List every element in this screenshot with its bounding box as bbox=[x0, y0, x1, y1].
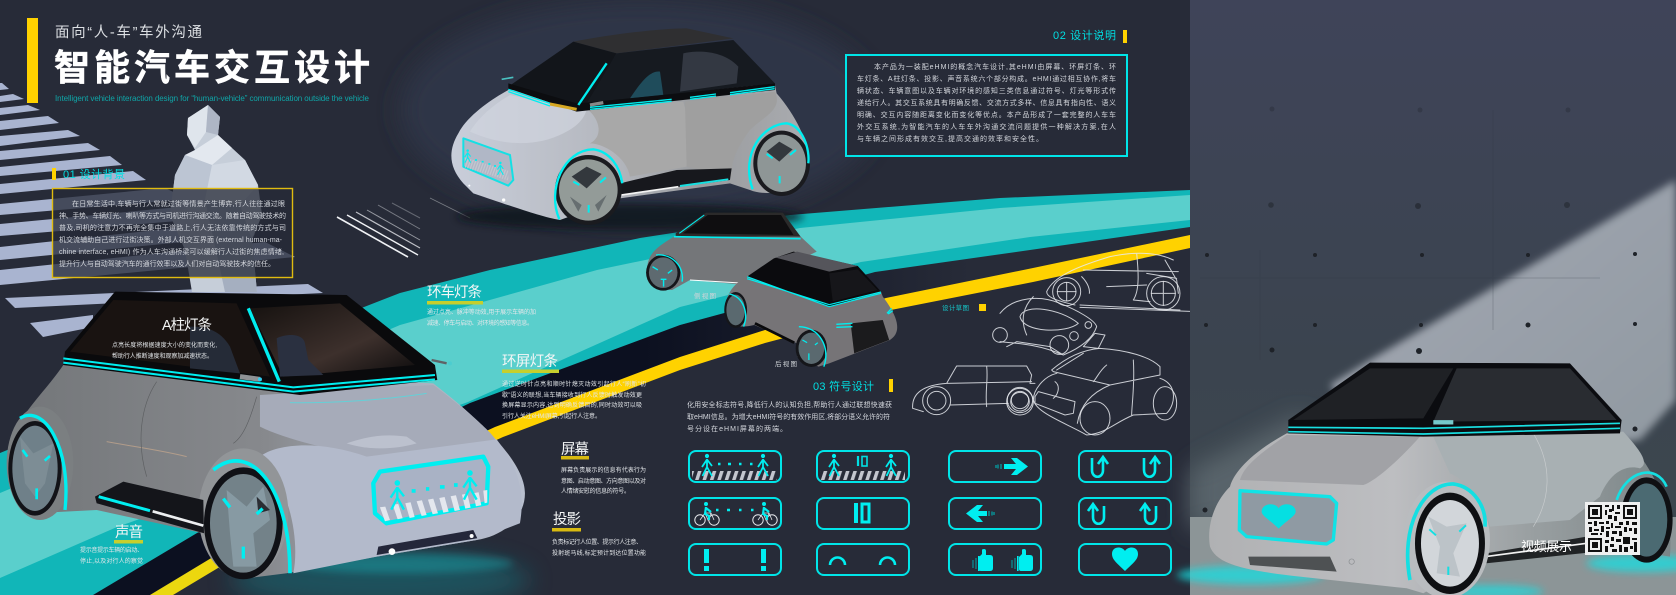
panel: design explanation heading: 02 设计说明 bbox=[1053, 28, 1116, 42]
panel: design background text box: 普及,司机的注意力不再完全集中于道路上,行人无法依靠传统的方式与司 bbox=[59, 223, 286, 232]
road band: black shadow strip bbox=[93, 227, 1190, 595]
callout: screen ring light strip: 换屏幕显示内容,达到明确反馈目的,同时动效可以吸 bbox=[502, 401, 642, 409]
callout: vehicle ring light strip: 减速、停车与启动、对环境的感知等信息。 bbox=[427, 319, 533, 327]
section heading: 03 symbol design: 03 符号设计 bbox=[813, 380, 874, 393]
callout: vehicle ring light strip bbox=[427, 284, 536, 327]
callout: A pillar light strip: 点亮长度将根据速度大小的变化而变化, bbox=[112, 341, 217, 349]
panel: design explanation text box: 车灯条、A柱灯条、投影、声音系统六个部分构成。eHMI通过相互协作,将车 bbox=[857, 74, 1116, 83]
symbol: pedestrians crossing bbox=[689, 451, 781, 482]
callout: screen bbox=[561, 441, 646, 495]
panel: design explanation text box: 明确、交互内容随距离变化而变化等优点。本产品形成了一套完整的人车车 bbox=[857, 110, 1116, 119]
callout: projection: 投射斑马线,标定预计到达位置功能 bbox=[552, 549, 646, 557]
callout: vehicle ring light strip: 环车灯条 bbox=[427, 284, 482, 301]
text: symbol design description: 化用安全标志符号,降低行人的认知负担,帮助行人通过联想快速获 bbox=[687, 400, 892, 409]
panel: design background text box: 在日常生活中,车辆与行人常就过街等情景产生博弈,行人往往通过眼 bbox=[72, 199, 285, 208]
callout: vehicle ring light strip: 通过点亮、脉冲等动效,用于展示车辆的加 bbox=[427, 308, 536, 316]
panel: design background text box: 提升行人与自动驾驶汽车的通行效率以及人们对自动驾驶技术的信任。 bbox=[59, 259, 275, 268]
wall: lighter lower-left wash bbox=[1190, 415, 1400, 530]
callout: screen ring light strip: 通过逆时针点亮和顺时针熄灭动效引起行人“刷新”初 bbox=[502, 380, 646, 388]
callout: A pillar light strip: 帮助行人推断速度和观察加减速状态。 bbox=[112, 352, 213, 360]
callout: sound bbox=[80, 523, 143, 565]
road band: light teal bbox=[0, 195, 1190, 578]
symbol: left arrow bbox=[949, 498, 1041, 529]
panel: design explanation text box: 本产品为一装配eHMI的概念汽车设计,其eHMI由屏幕、环屏灯条、环 bbox=[874, 62, 1116, 71]
panel: design background text box bbox=[52, 188, 292, 278]
section heading: 03 symbol design bbox=[813, 379, 893, 393]
main title: 智能汽车交互设计 bbox=[54, 47, 370, 88]
callout: projection: 负责标记行人位置、提示行人注意、 bbox=[552, 538, 642, 546]
symbol: thumbs up bbox=[949, 544, 1041, 575]
symbol: number ten bbox=[817, 498, 909, 529]
callout: screen: 屏幕 bbox=[561, 441, 590, 458]
road band: yellow line bbox=[150, 235, 1190, 595]
callout: screen ring light strip: 引行人关注eHMI屏幕,引起行人注意。 bbox=[502, 412, 601, 420]
english subtitle: Intelligent vehicle interaction design for “human-vehicle” communication outside the vehicle bbox=[55, 94, 370, 103]
symbol: cyclists crossing bbox=[689, 498, 781, 529]
callout: screen ring light strip: 歇”语义的联想,当车辆接收到行人反馈时触发动效更 bbox=[502, 391, 642, 399]
callout: screen: 人情绪安慰的信息的符号。 bbox=[561, 487, 630, 495]
sketch: left side view bbox=[913, 366, 1035, 415]
ground glow under big car bbox=[230, 552, 530, 595]
panel: design explanation text box: 辆状态、车辆意图以及车辆对环境的感知三类信息通过符号、灯光等形式传 bbox=[857, 86, 1116, 95]
illustration: top concept car bbox=[451, 28, 810, 230]
text: symbol design description bbox=[687, 400, 892, 433]
label: side view: 侧视图 bbox=[694, 291, 716, 300]
symbol: u-turn down arrows bbox=[1079, 498, 1171, 529]
symbol: right arrow bbox=[949, 451, 1041, 482]
section heading: 01 design background: 01 设计背景 bbox=[63, 167, 125, 181]
callout: A pillar light strip bbox=[112, 317, 217, 360]
background: soft spotlight behind top car bbox=[400, 0, 880, 220]
panel: design background text box: 神、手势、车辆灯光、喇叭等方式与司机进行沟通交流。随着自动驾驶技术的 bbox=[59, 211, 286, 220]
panel: design explanation heading bbox=[1053, 28, 1127, 43]
illustration: right panel hero car with heart screen bbox=[1177, 363, 1676, 595]
background: zebra crossing on the left bbox=[0, 83, 323, 337]
callout: sound: 提示音提示车辆的启动、 bbox=[80, 546, 143, 554]
background: dark main panel bbox=[0, 0, 1190, 595]
callout: sound: 声音 bbox=[115, 523, 143, 541]
callout: projection bbox=[552, 511, 646, 557]
symbol: smile arcs bbox=[817, 544, 909, 575]
illustration: concept sketches bbox=[913, 253, 1190, 435]
QR code bbox=[1585, 502, 1640, 555]
text: symbol design description: 取eHMI信息。为增大eHMI符号的有效作用区,将部分语义允许的符 bbox=[687, 412, 890, 421]
symbol: u-turn up arrows bbox=[1079, 451, 1171, 482]
label: sketch caption: 设计草图 bbox=[942, 303, 969, 312]
callout: screen ring light strip: 环屏灯条 bbox=[502, 353, 558, 370]
illustration: side view car bbox=[646, 213, 817, 291]
panel: design explanation text box bbox=[846, 55, 1127, 156]
label: sketch caption bbox=[942, 303, 986, 312]
sketch: top side view bbox=[1047, 253, 1190, 311]
panel: design background text box: chine interface, eHMI) 作为人车沟通桥梁可以缓解行人过街的焦虑情绪, bbox=[59, 247, 284, 256]
sketch: front three-quarter view bbox=[1007, 348, 1177, 435]
background: road stripes near the top car bbox=[337, 198, 470, 257]
symbol: exclamation marks bbox=[689, 544, 781, 575]
subtitle: 面向“人-车”车外沟通 bbox=[55, 24, 202, 41]
text: symbol design description: 号分设在eHMI屏幕的两端。 bbox=[687, 424, 787, 433]
illustration: header yellow bar bbox=[27, 18, 38, 103]
callout: A pillar light strip: A柱灯条 bbox=[162, 317, 212, 334]
panel: design explanation text box: 递给行人。其交互系统具有明确反馈、交流方式多样、信息具有指向性、语义 bbox=[857, 98, 1116, 107]
symbol: pedestrians with countdown bbox=[817, 451, 909, 482]
callout: screen: 屏幕负责展示的信息有代表行为 bbox=[561, 466, 646, 474]
label: rear view: 后视图 bbox=[775, 359, 797, 368]
panel: design explanation text box: 与车辆之间形成有效交互,提高交通的效率和安全性。 bbox=[857, 134, 1043, 143]
callout: screen ring light strip bbox=[502, 353, 646, 420]
wall: diagonal light patch bbox=[1330, 180, 1676, 470]
illustration: main large car bbox=[7, 292, 525, 579]
panel: design background text box: 机交流辅助自己进行过街决策。外部人机交互界面 (external human-ma- bbox=[59, 235, 283, 244]
callout: sound: 停止,以及对行人的察觉 bbox=[80, 557, 143, 565]
illustration: rear view car bbox=[724, 252, 897, 367]
sketch: top-down view bbox=[993, 297, 1105, 355]
road band: dark teal bbox=[0, 190, 1190, 595]
title block bbox=[54, 24, 370, 103]
panel: design explanation text box: 外交互系统,为智能汽车的人车车外沟通交流问题提供一种解决方案,在人 bbox=[857, 122, 1116, 131]
panel: concrete wall video area bbox=[1190, 0, 1676, 595]
illustration: low-poly pedestrian bbox=[170, 105, 262, 292]
callout: projection: 投影 bbox=[553, 511, 581, 528]
label: video link caption: 视频展示 bbox=[1521, 539, 1572, 554]
symbol: heart bbox=[1079, 544, 1171, 575]
callout: screen: 意图、启动意图、方向意图以及对 bbox=[561, 477, 646, 485]
